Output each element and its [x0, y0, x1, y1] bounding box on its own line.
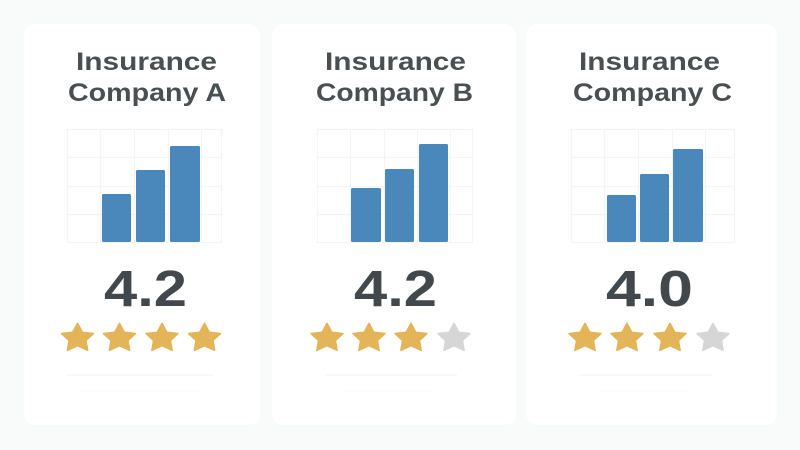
heading: Insurance Company A: Insurance — [76, 48, 217, 76]
bar chart: Company B — [318, 130, 472, 242]
panel: Insurance Company B — [272, 24, 516, 425]
divider lines — [325, 375, 457, 391]
rating number: 4.2: 4.2 — [104, 260, 187, 317]
heading: Insurance Company B: Insurance — [325, 48, 466, 76]
star rating: 3 of 4 filled — [569, 324, 729, 350]
heading: Insurance Company A — [68, 48, 226, 107]
star rating: 3 of 4 filled — [311, 324, 470, 350]
heading: Insurance Company C — [573, 48, 732, 107]
heading: Insurance Company C: Insurance — [579, 48, 720, 76]
panel: Insurance Company C — [526, 24, 777, 425]
heading: Insurance Company B: Company B — [316, 79, 473, 107]
heading: Insurance Company C: Company C — [573, 79, 732, 107]
panel: Insurance Company A — [24, 24, 260, 425]
star rating: 4 of 4 filled — [62, 324, 220, 350]
divider lines — [67, 375, 213, 391]
divider lines — [580, 375, 712, 391]
heading: Insurance Company A: Company A — [68, 79, 226, 107]
rating number: 4.0: 4.0 — [606, 260, 693, 317]
heading: Insurance Company B — [316, 48, 473, 107]
bar chart: Company A — [68, 130, 222, 242]
bar chart: Company C — [572, 130, 734, 242]
rating number: 4.2: 4.2 — [354, 260, 437, 317]
